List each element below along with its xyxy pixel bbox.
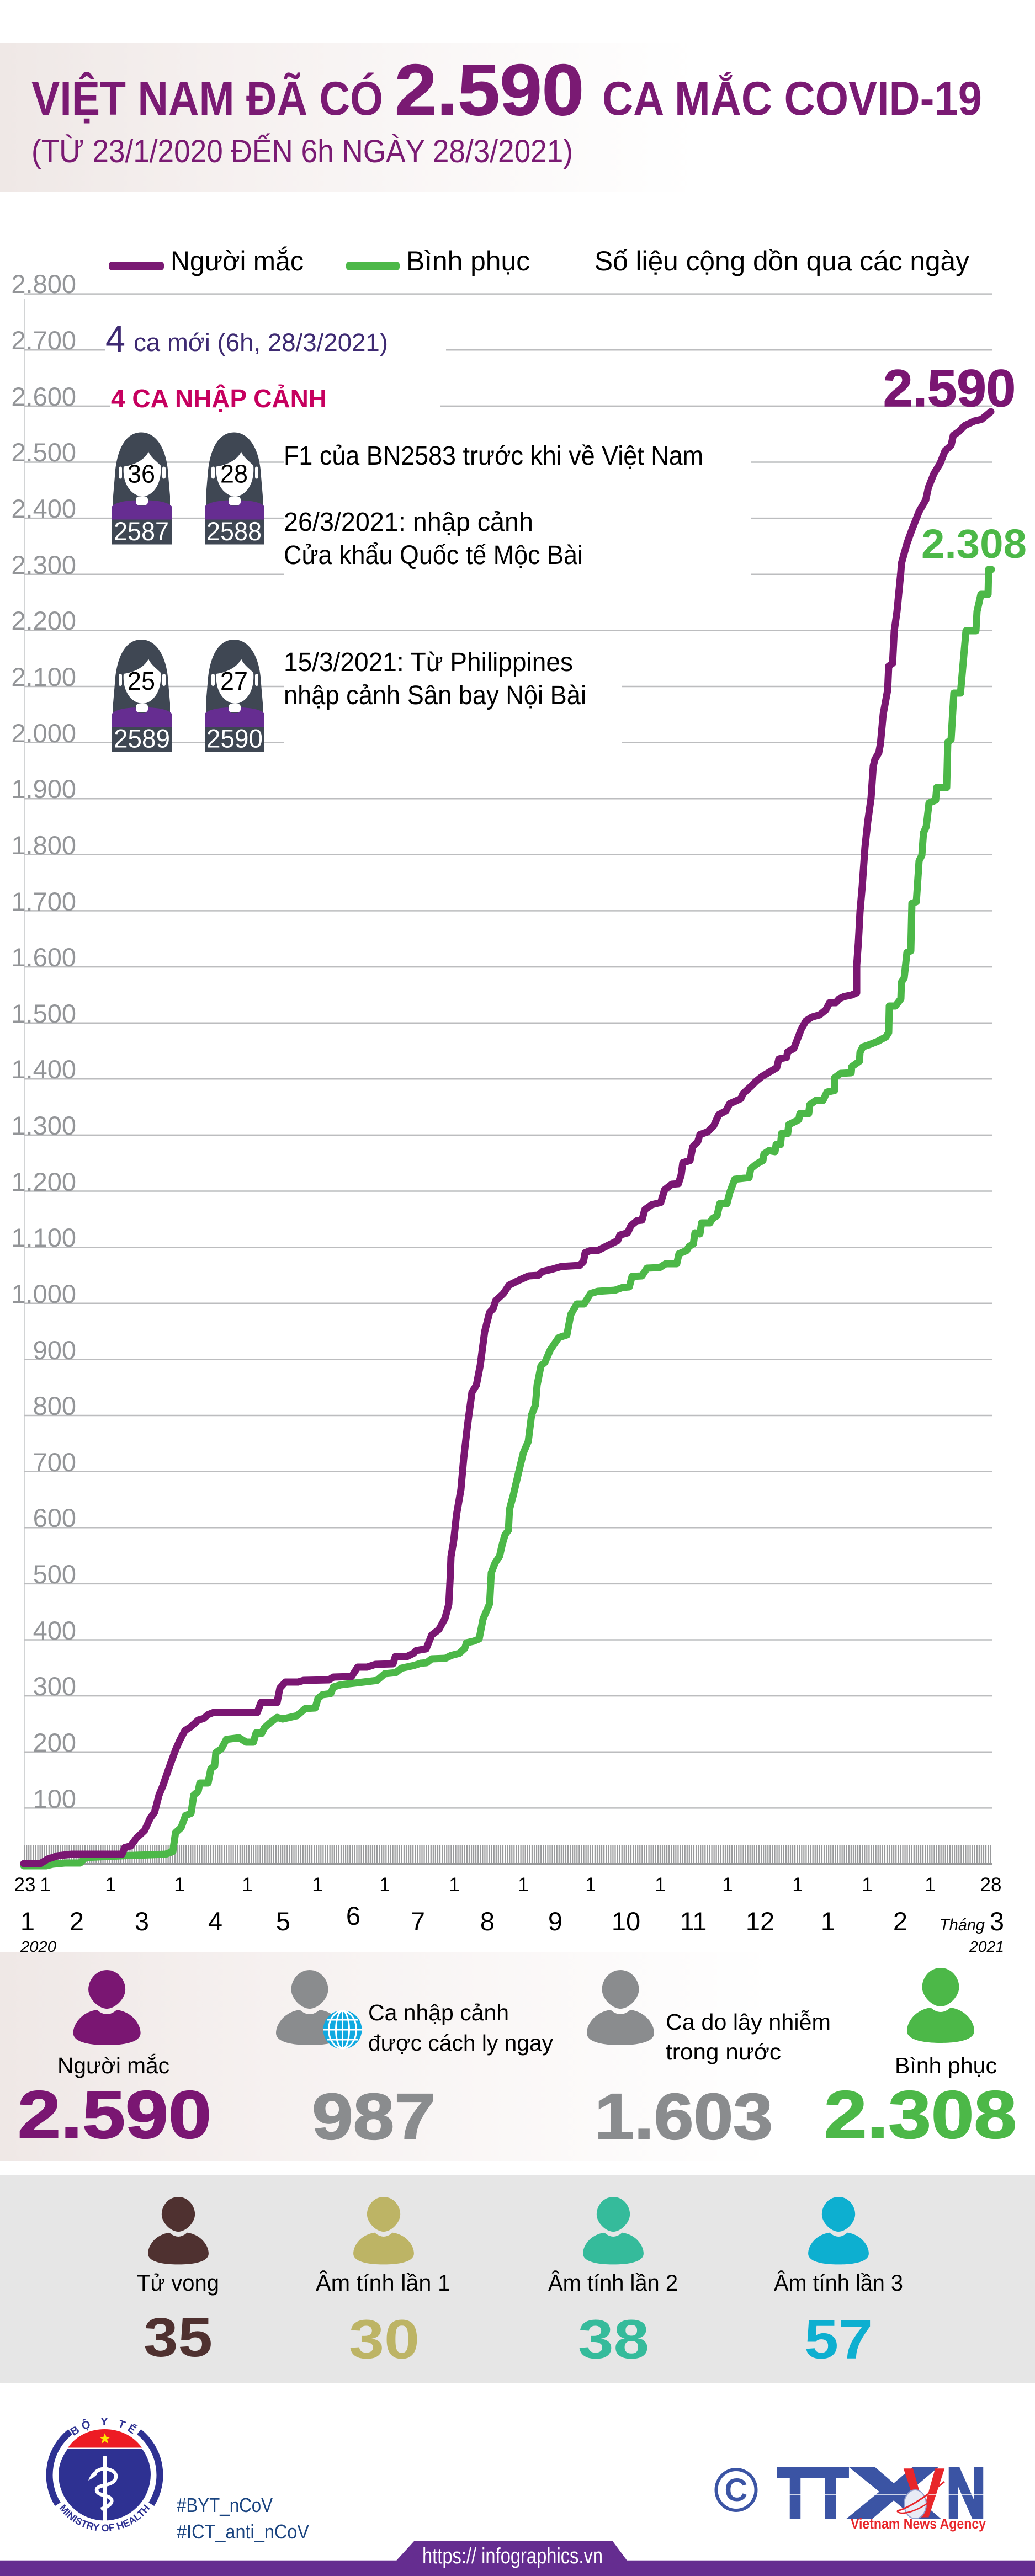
case notes: patients 2589, 2590: nhập cảnh Sân bay Nội Bài	[284, 681, 586, 710]
y axis labels: 500	[33, 1560, 76, 1589]
label: domestic: trong nước	[666, 2039, 781, 2064]
x axis month labels: 8	[480, 1907, 495, 1936]
icon: patient 2590	[205, 640, 264, 753]
icon: patient 2589: 2589	[114, 724, 170, 753]
number: negative once: 30	[349, 2309, 420, 2371]
x axis month labels: 3	[135, 1907, 149, 1936]
title: 2.590	[395, 49, 584, 130]
hashtags	[177, 2494, 309, 2543]
icon: patient 2587	[112, 433, 172, 546]
number: deaths: 35	[144, 2307, 213, 2369]
x axis day ticks: 23	[14, 1874, 35, 1896]
new cases heading: ca mới (6h, 28/3/2021)	[134, 328, 388, 356]
imported cases heading: 4 CA NHẬP CẢNH	[111, 384, 327, 413]
y axis labels: 1.900	[11, 774, 76, 803]
y axis labels: 1.500	[11, 999, 76, 1028]
new cases heading	[105, 318, 388, 360]
label: confirmed: Người mắc	[57, 2053, 169, 2078]
x axis month labels	[20, 1901, 1004, 1936]
icon: patient 2590: 2590	[206, 724, 263, 753]
x axis day ticks: 1	[174, 1874, 185, 1896]
x axis month labels: 10	[612, 1907, 640, 1936]
icon: negative once person	[353, 2197, 414, 2264]
logo: TTXVN: Vietnam News Agency	[851, 2515, 986, 2532]
footer bar with URL: https:// infographics.vn	[422, 2544, 603, 2568]
x axis month labels: 2	[893, 1907, 907, 1936]
case notes: patients 2589, 2590: 15/3/2021: Từ Philippines	[284, 648, 573, 677]
year 2021: 2021	[969, 1938, 1004, 1955]
x axis month labels: 7	[411, 1907, 425, 1936]
x axis day ticks: 1	[242, 1874, 253, 1896]
y axis labels: 2.800	[11, 269, 76, 299]
legend	[109, 246, 969, 276]
label: recovered: Bình phục	[895, 2053, 997, 2078]
case notes: patients 2587, 2588: 26/3/2021: nhập cảnh	[284, 508, 533, 537]
y axis labels: 2.700	[11, 326, 76, 355]
subtitle: (TỪ 23/1/2020 ĐẾN 6h NGÀY 28/3/2021)	[31, 134, 573, 169]
number: confirmed: 2.590	[18, 2077, 211, 2152]
y axis labels: 2.600	[11, 382, 76, 411]
logo: Ministry of Health	[46, 2418, 163, 2532]
logo: Ministry of Health: BỘ Y TẾ	[70, 2418, 138, 2436]
year 2020: 2020	[20, 1938, 56, 1955]
y axis labels: 400	[33, 1616, 76, 1645]
x axis month labels: 1	[20, 1907, 35, 1936]
y axis labels: 1.100	[11, 1223, 76, 1252]
case notes: patients 2587, 2588: F1 của BN2583 trước khi về Việt Nam	[284, 441, 703, 471]
number: imported: 987	[312, 2080, 436, 2153]
label: domestic: Ca do lây nhiễm	[666, 2009, 831, 2035]
end label: recovered: 2.308	[921, 521, 1027, 567]
logo: TTXVN: T	[813, 2453, 848, 2533]
x axis month labels: 4	[208, 1907, 222, 1936]
x axis day ticks: 1	[792, 1874, 803, 1896]
logo: TTXVN: V	[903, 2453, 945, 2533]
y axis labels: 1.000	[11, 1279, 76, 1308]
title	[31, 49, 982, 130]
title: CA MẮC COVID-19	[602, 72, 982, 125]
y axis labels: 1.600	[11, 943, 76, 972]
icon: patient 2589	[112, 640, 172, 753]
logo: TTXVN: T	[777, 2453, 813, 2533]
y axis labels: 1.300	[11, 1111, 76, 1140]
x axis month labels: 2	[70, 1907, 84, 1936]
icon: negative twice person	[583, 2197, 644, 2264]
legend: Số liệu cộng dồn qua các ngày	[595, 246, 969, 276]
x axis month labels: 5	[276, 1907, 290, 1936]
legend: Bình phục	[406, 246, 530, 276]
logo: TTXVN: X	[850, 2453, 937, 2533]
icon: patient 2590: 27	[220, 667, 248, 695]
y axis labels: 600	[33, 1503, 76, 1532]
case notes: patients 2589, 2590	[284, 648, 586, 710]
icon: patient 2588: 28	[220, 459, 248, 488]
day hatch band on x axis	[24, 1845, 992, 1865]
line chart	[11, 269, 1027, 1955]
logo: copyright mark	[716, 2469, 756, 2510]
icon: deaths person	[148, 2197, 209, 2264]
y axis labels: 2.500	[11, 438, 76, 467]
label: domestic	[666, 2009, 831, 2064]
y axis labels: 1.400	[11, 1055, 76, 1084]
x axis day ticks: 1	[379, 1874, 390, 1896]
hashtags: #BYT_nCoV	[177, 2494, 273, 2516]
label: negative three times: Âm tính lần 3	[774, 2270, 903, 2296]
x axis day ticks: 1	[925, 1874, 936, 1896]
hashtags: #ICT_anti_nCoV	[177, 2520, 309, 2543]
label: imported: được cách ly ngay	[368, 2030, 553, 2056]
icon: patient 2588	[205, 433, 264, 546]
confirmed curve	[24, 412, 991, 1864]
label: imported: Ca nhập cảnh	[368, 2000, 509, 2025]
x axis day ticks: 1	[105, 1874, 116, 1896]
panel: outcomes	[0, 2175, 1035, 2383]
x axis month labels: 6	[346, 1901, 360, 1930]
y axis labels: 2.100	[11, 662, 76, 691]
x axis day ticks	[14, 1874, 1001, 1896]
x axis day ticks: 1	[40, 1874, 51, 1896]
recovered curve	[24, 570, 991, 1866]
case notes: patients 2587, 2588	[284, 441, 703, 570]
x axis day ticks: 1	[862, 1874, 873, 1896]
y axis labels: 100	[33, 1784, 76, 1813]
x axis day ticks: 1	[449, 1874, 460, 1896]
y axis labels: 300	[33, 1672, 76, 1701]
logo: Ministry of Health: MINISTRY OF HEALTH	[60, 2504, 150, 2532]
label: imported	[368, 2000, 553, 2056]
label: deaths: Tử vong	[137, 2270, 219, 2296]
number: negative twice: 38	[578, 2309, 649, 2371]
icon: patient 2587: 2587	[114, 517, 169, 546]
legend: Người mắc	[171, 246, 304, 276]
number: negative three times: 57	[804, 2309, 873, 2371]
logo: TTXVN: N	[946, 2453, 986, 2533]
number: recovered: 2.308	[824, 2077, 1017, 2152]
y axis labels: 700	[33, 1447, 76, 1477]
title: VIỆT NAM ĐÃ CÓ	[31, 72, 383, 125]
x axis day ticks: 1	[518, 1874, 529, 1896]
logo: TTXVN	[777, 2453, 986, 2533]
new cases heading: 4	[105, 318, 125, 360]
icon: confirmed person	[73, 1970, 141, 2045]
y axis labels: 2.300	[11, 550, 76, 579]
x axis day ticks: 1	[655, 1874, 666, 1896]
x axis month labels: 9	[548, 1907, 562, 1936]
month axis caption: Tháng	[940, 1916, 985, 1934]
footer bar with URL	[0, 2541, 1035, 2576]
y axis labels: 2.000	[11, 718, 76, 748]
label: negative once: Âm tính lần 1	[316, 2270, 450, 2296]
header band with title	[0, 43, 982, 192]
y axis labels: 900	[33, 1335, 76, 1365]
x axis day ticks: 1	[722, 1874, 733, 1896]
icon: imported person with globe	[276, 1970, 362, 2049]
end label: confirmed: 2.590	[883, 359, 1016, 418]
x axis month labels: 12	[746, 1907, 774, 1936]
icon: negative three times person	[808, 2197, 869, 2264]
icon: domestic person	[587, 1970, 654, 2045]
y axis labels	[11, 269, 76, 1813]
case notes: patients 2587, 2588: Cửa khẩu Quốc tế Mộc Bài	[284, 541, 583, 570]
icon: patient 2588: 2588	[206, 517, 262, 546]
x axis month labels: 3	[990, 1907, 1004, 1936]
panel: totals	[0, 1952, 1017, 2161]
y axis labels: 200	[33, 1728, 76, 1757]
label: negative twice: Âm tính lần 2	[548, 2270, 678, 2296]
icon: patient 2587: 36	[128, 459, 155, 488]
y axis labels: 800	[33, 1391, 76, 1420]
y axis labels: 1.200	[11, 1167, 76, 1196]
x axis month labels: 11	[680, 1907, 707, 1936]
y axis labels: 2.200	[11, 606, 76, 635]
logo: copyright mark: C	[725, 2472, 747, 2508]
x axis day ticks: 1	[585, 1874, 596, 1896]
icon: recovered person	[907, 1968, 974, 2043]
x axis day ticks: 1	[312, 1874, 323, 1896]
number: domestic: 1.603	[595, 2080, 773, 2153]
y axis labels: 1.800	[11, 831, 76, 860]
x axis day ticks: 28	[980, 1874, 1001, 1896]
y axis labels: 1.700	[11, 887, 76, 916]
x axis month labels: 1	[821, 1907, 835, 1936]
icon: patient 2589: 25	[128, 667, 155, 695]
y axis labels: 2.400	[11, 494, 76, 523]
